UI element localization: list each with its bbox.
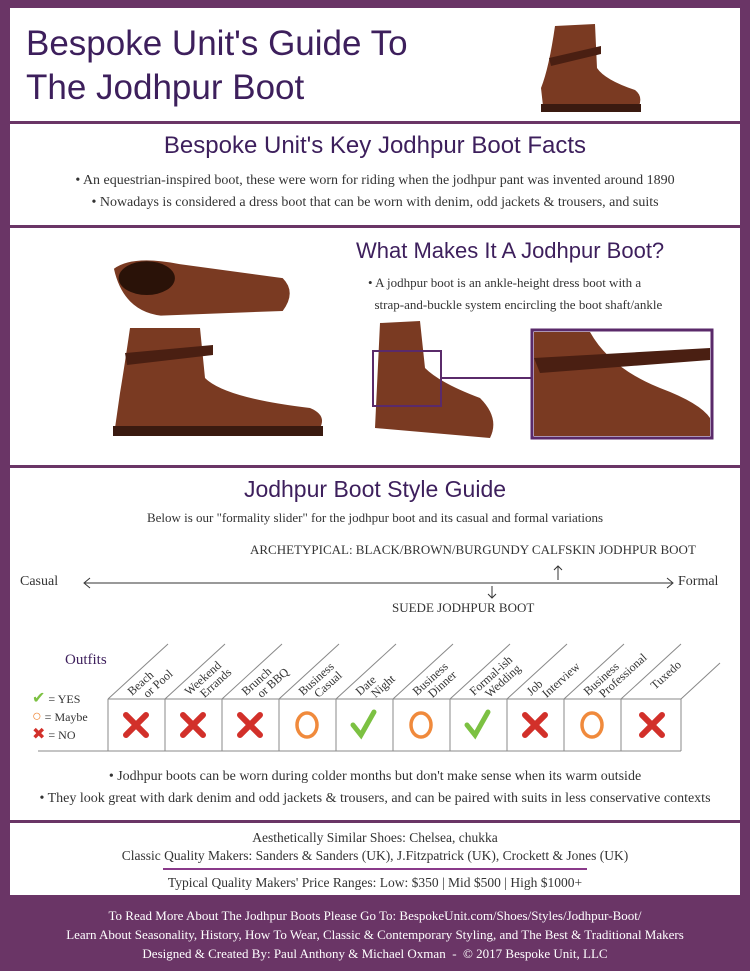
legend: ✖ = NO [32,726,76,743]
text: price ranges: Typical Quality Makers' Price Ranges: Low: $350 | Mid $500 | High $1000+ [168,875,582,890]
legend: ✔ = YES [32,690,80,707]
panel: what makes it [10,228,740,465]
icon: boot zoom detail [372,321,714,440]
chart: formality slider: Formal [678,574,718,589]
heading: outfits: Outfits [65,652,107,668]
chart: outfits table: Errands [197,665,234,700]
chart: outfits table: Weekend [182,658,224,698]
text: definition [368,275,662,312]
footer: Designed & Created By: Paul Anthony & Michael Oxman - © 2017 Bespoke Unit, LLC [142,946,608,961]
title [26,24,408,107]
text: similar shoes and makers: Classic Quality Makers: Sanders & Sanders (UK), J.Fitzpatrick (UK), Crockett & Jones (UK) [122,848,628,863]
chart: outfits table: or BBQ [254,665,292,700]
legend: ○ = Maybe [32,708,88,725]
chart: outfits table: Professional [596,650,650,700]
text: notes: • They look great with dark denim and odd jackets & trousers, and can be paired with suits in less conservative contexts [39,791,711,806]
chart: outfits table: Beach [125,668,156,698]
chart: outfits table: Date [353,673,379,698]
footer: Learn About Seasonality, History, How To Wear, Classic & Contemporary Styling, and The Best & Traditional Makers [66,927,684,942]
chart: formality slider [20,565,718,615]
chart: outfits table: Brunch [239,664,274,698]
title: Bespoke Unit's Guide To [26,24,408,63]
chart: outfits table: Wedding [482,661,523,700]
heading: style guide: Jodhpur Boot Style Guide [244,476,506,502]
chart: formality slider: SUEDE JODHPUR BOOT [392,600,534,615]
chart: outfits table: Business [296,659,337,698]
chart: outfits table: or Pool [140,666,176,700]
icon: boot header [541,24,641,112]
footer: To Read More About The Jodhpur Boots Please Go To: BespokeUnit.com/Shoes/Styles/Jodhpur-Boot/ [109,908,641,923]
text: intro: Below is our "formality slider" for the jodhpur boot and its casual and formal variations [147,510,603,525]
text: definition: strap-and-buckle system encircling the boot shaft/ankle [374,297,662,312]
chart: outfits table: Interview [539,659,583,700]
chart: outfits table: Business [410,659,451,698]
legend [32,690,88,743]
text: facts [75,173,675,210]
chart: outfits table: Job [524,677,545,698]
heading: key facts: Bespoke Unit's Key Jodhpur Boot Facts [164,132,586,159]
chart: outfits table: Business [581,659,622,698]
chart: outfits table: Tuxedo [648,658,684,692]
panel: header [10,8,740,121]
chart: outfits table: Formal-ish [467,653,515,698]
panel: makers [10,823,740,895]
panel: style guide [10,468,740,820]
chart: outfits table: Dinner [425,668,459,700]
label: archetypical: ARCHETYPICAL: BLACK/BROWN/BURGUNDY CALFSKIN JODHPUR BOOT [250,542,696,557]
text: similar shoes and makers [122,830,628,863]
icon: boot top view [114,260,290,316]
heading: what makes it: What Makes It A Jodhpur Boot? [356,238,664,263]
text: definition: • A jodhpur boot is an ankle-height dress boot with a [368,275,641,290]
text: facts: • Nowadays is considered a dress boot that can be worn with denim, odd jackets & trousers, and suits [91,195,659,210]
chart: outfits table [38,644,720,752]
text: notes [39,769,711,806]
icon: boot side view [113,328,323,436]
panel: key facts [10,124,740,225]
chart: outfits table: Night [368,671,398,700]
chart: formality slider: Casual [20,574,58,589]
text: facts: • An equestrian-inspired boot, these were worn for riding when the jodhpur pant was invented around 1890 [75,173,675,188]
title: The Jodhpur Boot [26,68,304,107]
text: notes: • Jodhpur boots can be worn during colder months but don't make sense when its warm outside [109,769,641,784]
text: similar shoes and makers: Aesthetically Similar Shoes: Chelsea, chukka [252,830,498,845]
chart: outfits table: Casual [311,668,345,700]
footer [66,908,684,961]
